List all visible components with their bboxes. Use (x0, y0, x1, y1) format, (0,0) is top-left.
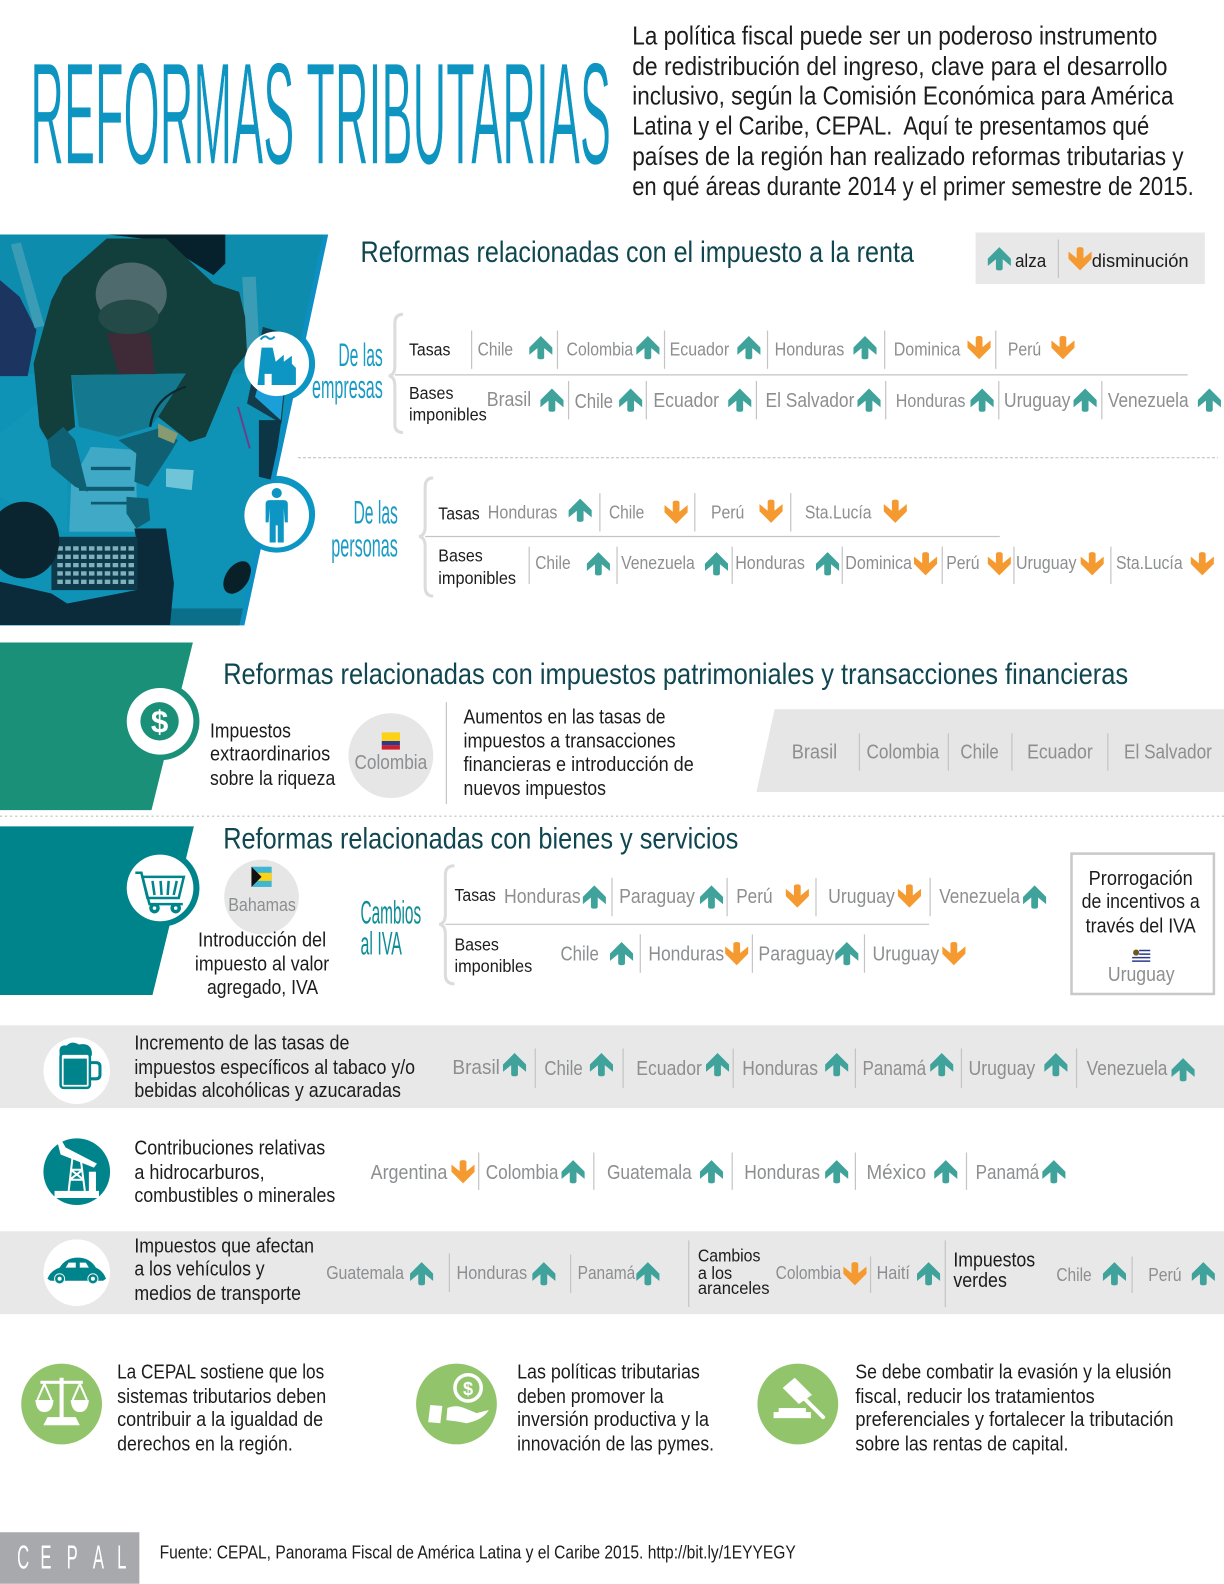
text: impuestos verdes: verdes (953, 1270, 1007, 1292)
row: empresas tasas: Tasas (409, 340, 451, 360)
item: Panamá alza (862, 1053, 953, 1080)
label: de las personas: personas (331, 528, 398, 564)
heading: bienes y servicios: Reformas relacionadas con bienes y servicios (223, 823, 738, 856)
item: Perú alza: Perú (1148, 1264, 1182, 1285)
item: Ecuador alza: Ecuador (670, 339, 729, 360)
item: Argentina baja: Argentina (371, 1162, 448, 1184)
label: de las empresas (312, 337, 383, 405)
item: Sta.Lucía baja: Sta.Lucía (1116, 552, 1183, 573)
text: Incremento de las tasas de (134, 1033, 349, 1055)
item: Colombia alza: Colombia (567, 339, 634, 360)
logo: CEPAL (0, 1532, 139, 1584)
text: sistemas tributarios deben (117, 1386, 326, 1408)
row: IVA bases imponibles: Bases (454, 935, 499, 955)
text: impuestos específicos al tabaco y/o (134, 1057, 415, 1079)
item: México alza (866, 1160, 957, 1184)
row: empresas tasas (409, 330, 1075, 369)
intro text block: de redistribución del ingreso, clave para el desarrollo (632, 53, 1167, 81)
text: contribuir a la igualdad de (117, 1409, 323, 1431)
icon: hand and coin (416, 1364, 497, 1444)
item: Honduras alza: Honduras (742, 1058, 818, 1080)
text: medios de transporte (134, 1283, 301, 1305)
item: Chile alza: Chile (544, 1058, 583, 1080)
text: aumentos en las tasas (464, 706, 694, 800)
photo panel: two men at a desk (0, 234, 328, 628)
item: Panamá alza: Panamá (976, 1162, 1040, 1184)
item: Ecuador alza (636, 1053, 729, 1080)
item: Chile alza: Chile (560, 944, 599, 966)
item: Sta.Lucía baja: Sta.Lucía (805, 501, 872, 522)
row: personas bases imponibles (438, 546, 1214, 588)
label: de las personas (331, 494, 398, 564)
item: Perú baja: Perú (1008, 339, 1041, 360)
conclusion 1: igualdad (21, 1362, 326, 1455)
item: El Salvador alza: El Salvador (766, 390, 855, 412)
item: Brasil alza (487, 389, 564, 412)
callout: prorrogación: Uruguay (1108, 964, 1175, 986)
icon: gavel (757, 1364, 838, 1444)
source: Fuente: CEPAL, Panorama Fiscal de América Latina y el Caribe 2015. http://bit.ly/1EYYEGY (160, 1542, 796, 1563)
item: Honduras alza: Honduras (744, 1162, 820, 1184)
text: combustibles o minerales (134, 1185, 335, 1207)
text: introducción del IVA: agregado, IVA (207, 977, 319, 999)
label: cambios al IVA (361, 894, 421, 962)
item: Chile alza: Chile (1056, 1264, 1092, 1285)
heading: impuesto a la renta: Reformas relacionadas con el impuesto a la renta (361, 236, 915, 269)
item: Brasil alza: Brasil (487, 389, 531, 411)
text (517, 1362, 714, 1455)
item: Chile alza (535, 552, 610, 575)
text: Impuestos que afectan (134, 1236, 314, 1258)
row: empresas bases imponibles: imponibles (409, 404, 487, 424)
callout: prorrogación: Prorrogación (1089, 868, 1193, 890)
item: Chile baja (609, 501, 688, 524)
text: derechos en la región. (117, 1433, 293, 1455)
row: personas bases imponibles: Bases (438, 546, 483, 566)
text: De las (338, 337, 383, 373)
icon: scales (21, 1364, 102, 1444)
callout: prorrogación: través del IVA (1086, 915, 1196, 937)
row: personas bases imponibles: imponibles (438, 568, 516, 588)
item: Perú baja (736, 884, 809, 908)
item: Honduras alza: Honduras (504, 886, 581, 908)
text (117, 1362, 326, 1455)
item: Honduras alza: Honduras (488, 501, 557, 522)
row: empresas bases imponibles: Bases (409, 383, 454, 403)
item: Dominica baja: Dominica (894, 339, 961, 360)
panel: country list financieras (756, 709, 1224, 792)
item: Chile alza (544, 1053, 613, 1080)
item: Ecuador alza (670, 336, 760, 360)
callout: prorrogación (1072, 854, 1214, 994)
row: empresas bases imponibles (409, 381, 1221, 424)
item: Chile alza (1056, 1262, 1126, 1285)
item: Perú baja: Perú (946, 552, 980, 573)
item: Perú baja (946, 552, 1011, 575)
item: Ecuador alza: Ecuador (636, 1058, 702, 1080)
text: innovación de las pymes. (517, 1433, 714, 1455)
intro text block: La política fiscal puede ser un poderoso instrumento (632, 23, 1157, 51)
item: Uruguay baja: Uruguay (828, 886, 896, 908)
item: Colombia baja: Colombia (776, 1262, 842, 1283)
item: Honduras alza: Honduras (775, 339, 844, 360)
item: Brasil alza (452, 1053, 526, 1079)
panel: country list financieras: Brasil (792, 742, 837, 764)
intro text block: Latina y el Caribe, CEPAL. Aquí te presentamos qué (632, 113, 1149, 141)
item: Paraguay alza: Paraguay (758, 944, 835, 966)
label: cambios al IVA: al IVA (361, 926, 402, 962)
text (134, 1033, 415, 1102)
text: cambios a los aranceles: a los (698, 1263, 732, 1283)
row: IVA tasas: Tasas (454, 885, 496, 905)
icon: car (43, 1239, 110, 1306)
icon: person (244, 483, 309, 548)
band: vehículos, aranceles, impuestos verdes (0, 1231, 1224, 1314)
text: Las políticas tributarias (517, 1362, 700, 1384)
legend (976, 233, 1205, 284)
badge: Colombia: Colombia (354, 752, 428, 774)
text: cambios a los aranceles (698, 1246, 770, 1298)
text: a los vehículos y (134, 1259, 265, 1281)
text: cambios a los aranceles: Cambios (698, 1246, 761, 1266)
panel: country list financieras: Ecuador (1027, 742, 1093, 764)
item: Chile alza (560, 942, 633, 966)
text: De las (353, 494, 398, 530)
item: Ecuador alza: Ecuador (653, 390, 719, 412)
text: impuestos extraordinarios: Impuestos (210, 720, 291, 742)
icon: hand and coin: $ (463, 1379, 473, 1399)
item: Honduras baja: Honduras (648, 944, 724, 966)
row: IVA tasas (454, 878, 1046, 916)
badge: Bahamas (224, 860, 299, 934)
intro text block (632, 23, 1194, 201)
text (855, 1362, 1174, 1455)
item: Perú baja (1008, 336, 1075, 360)
item: Panamá alza: Panamá (578, 1262, 636, 1283)
panel: patrimoniales green tab (0, 643, 199, 810)
item: Perú alza (1148, 1262, 1215, 1285)
text: introducción del IVA (195, 930, 329, 999)
item: Chile alza: Chile (535, 552, 571, 573)
legend: alza (1015, 250, 1047, 271)
text: La CEPAL sostiene que los (117, 1362, 324, 1384)
item: Uruguay alza: Uruguay (1004, 390, 1071, 412)
icon: beer mug (43, 1037, 110, 1104)
text: empresas (312, 369, 383, 405)
panel: patrimoniales green tab: $ (151, 704, 168, 739)
text: sobre las rentas de capital. (855, 1433, 1068, 1455)
item: Haití alza: Haití (877, 1262, 911, 1283)
panel: country list financieras: Colombia (866, 742, 940, 764)
icon: factory (244, 331, 309, 396)
item: Uruguay baja: Uruguay (1016, 552, 1077, 573)
badge: Colombia (348, 713, 433, 798)
text: aumentos en las tasas: financieras e introducción de (464, 754, 694, 776)
item: Perú baja: Perú (711, 501, 744, 522)
item: Uruguay baja: Uruguay (873, 944, 940, 966)
item: Sta.Lucía baja (805, 500, 907, 523)
text: bebidas alcohólicas y azucaradas (134, 1080, 401, 1102)
text: Contribuciones relativas (134, 1138, 325, 1160)
item: Uruguay alza: Uruguay (968, 1058, 1036, 1080)
item: Honduras alza: Honduras (735, 552, 805, 573)
text: impuestos verdes: Impuestos (953, 1250, 1035, 1272)
text: impuestos extraordinarios: sobre la riqueza (210, 768, 336, 790)
logo: CEPAL: CEPAL (17, 1538, 126, 1576)
text: preferenciales y fortalecer la tributación (855, 1409, 1174, 1431)
item: Honduras alza: Honduras (456, 1262, 527, 1283)
legend: disminución (1092, 250, 1189, 271)
callout: prorrogación: de incentivos a (1082, 891, 1200, 913)
item: Uruguay alza (968, 1053, 1067, 1080)
item: Chile alza (478, 336, 552, 360)
item: Chile alza (575, 389, 642, 413)
item: Perú baja (711, 500, 783, 523)
text: Se debe combatir la evasión y la elusión (855, 1362, 1171, 1384)
item: Chile alza: Chile (575, 391, 613, 413)
text: impuestos extraordinarios: extraordinarios (210, 744, 330, 766)
item: Honduras alza (742, 1053, 848, 1080)
row: hidrocarburos (43, 1138, 1065, 1207)
item: Brasil alza: Brasil (452, 1057, 500, 1079)
item: Honduras alza: Honduras (896, 390, 965, 411)
item: México alza: México (866, 1162, 926, 1184)
text: impuestos verdes (953, 1250, 1035, 1292)
text: aumentos en las tasas: Aumentos en las tasas de (464, 706, 666, 728)
text: aumentos en las tasas: impuestos a transacciones (464, 731, 676, 753)
item: Paraguay alza: Paraguay (619, 886, 696, 908)
item: Colombia alza: Colombia (486, 1162, 559, 1184)
text: deben promover la (517, 1386, 664, 1408)
text: introducción del IVA: Introducción del (198, 930, 326, 952)
item: Venezuela alza: Venezuela (1087, 1058, 1168, 1080)
item: Dominica baja: Dominica (845, 552, 912, 573)
panel: bienes y servicios teal tab with cart (0, 826, 199, 995)
text (134, 1236, 314, 1305)
item: Perú baja: Perú (736, 886, 773, 908)
text: fiscal, reducir los tratamientos (855, 1386, 1095, 1408)
row: personas tasas: Tasas (438, 503, 480, 523)
text: Cambios (361, 894, 421, 930)
icon rings behind the photo (238, 325, 315, 553)
text: aumentos en las tasas: nuevos impuestos (464, 778, 606, 800)
item: Haití alza (877, 1262, 940, 1285)
item: Honduras alza (735, 552, 839, 575)
row: IVA bases imponibles (454, 934, 965, 976)
item: Chile alza: Chile (478, 339, 513, 360)
icon: oil pump (43, 1138, 110, 1205)
row: IVA bases imponibles: imponibles (454, 956, 532, 976)
badge: Bahamas: Bahamas (228, 894, 296, 915)
text: introducción del IVA: impuesto al valor (195, 954, 329, 976)
text: cambios a los aranceles: aranceles (698, 1278, 770, 1298)
text: impuestos extraordinarios (210, 720, 336, 790)
item: Guatemala alza: Guatemala (326, 1262, 404, 1283)
conclusion 3: evasión (757, 1362, 1174, 1455)
item: Venezuela alza: Venezuela (939, 886, 1021, 908)
panel: country list financieras: Chile (960, 742, 999, 764)
row: personas tasas (438, 493, 907, 531)
item: Guatemala alza: Guatemala (607, 1162, 692, 1184)
text: inversión productiva y la (517, 1409, 710, 1431)
conclusion 2: inversión (416, 1362, 714, 1455)
text (134, 1138, 335, 1207)
item: Panamá alza: Panamá (862, 1058, 927, 1080)
item: Chile baja: Chile (609, 501, 644, 522)
item: Venezuela alza: Venezuela (621, 552, 695, 573)
text: a hidrocarburos, (134, 1162, 265, 1184)
item: Honduras alza (488, 499, 592, 522)
band: tabaco y bebidas (0, 1025, 1224, 1108)
item: Venezuela alza: Venezuela (1108, 390, 1189, 412)
